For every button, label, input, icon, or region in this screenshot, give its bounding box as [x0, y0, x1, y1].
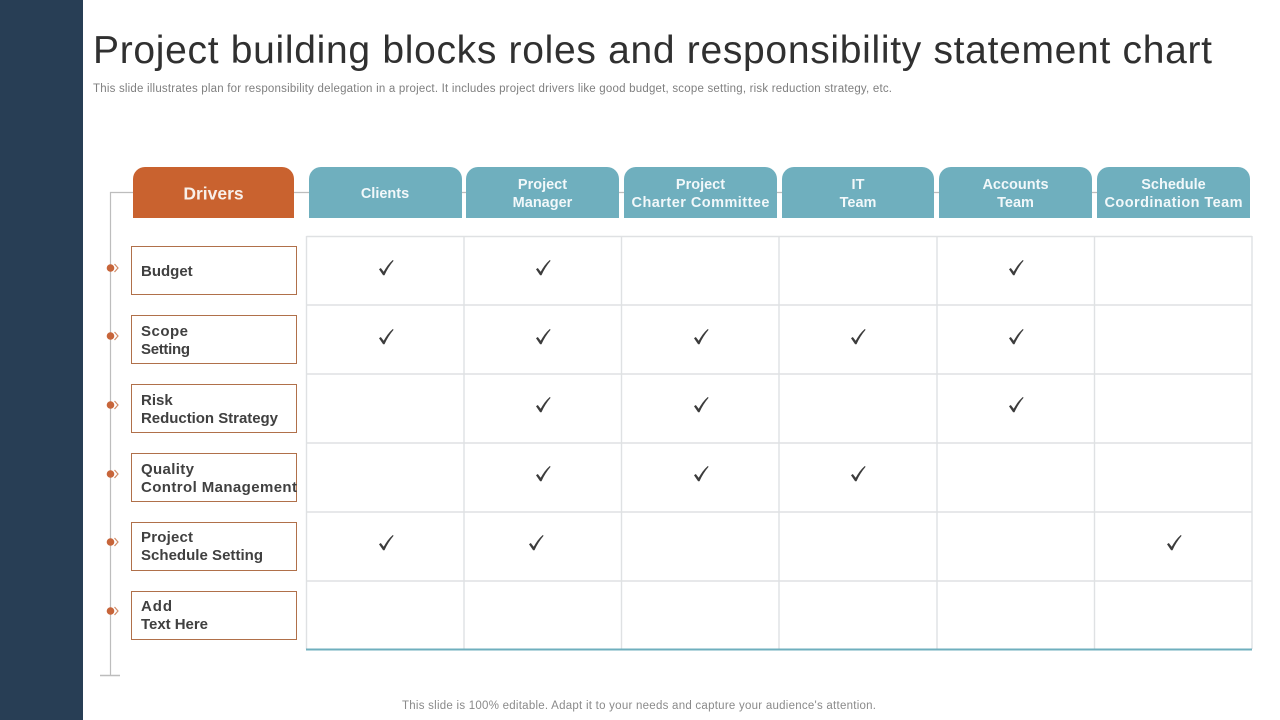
- driver: project schedule setting: Project: [141, 529, 193, 546]
- timeline connector: [100, 192, 1097, 676]
- driver: scope setting: Setting: [141, 341, 190, 358]
- header: accounts team: [939, 167, 1092, 218]
- driver: scope setting: [107, 316, 296, 364]
- header: clients: [309, 167, 462, 218]
- driver: risk reduction strategy: Risk: [141, 392, 173, 409]
- responsibility grid: [306, 236, 1252, 650]
- header: project charter committee: [624, 167, 777, 218]
- header: project manager: [466, 167, 619, 218]
- driver: project schedule setting: Schedule Setting: [141, 547, 263, 564]
- header: project charter committee: Project: [676, 177, 725, 193]
- driver: quality control management: Control Management: [141, 479, 297, 496]
- driver: scope setting: Scope: [141, 323, 188, 340]
- driver: risk reduction strategy: Reduction Strategy: [141, 410, 279, 427]
- header: drivers: [133, 167, 294, 218]
- driver: quality control management: Quality: [141, 461, 195, 478]
- header: it team: IT: [852, 177, 865, 193]
- driver: budget: [107, 246, 296, 294]
- driver: add text here: [107, 592, 296, 640]
- header: project manager: Manager: [513, 195, 573, 211]
- header: it team: [782, 167, 934, 218]
- driver: risk reduction strategy: [107, 384, 296, 432]
- title: Project building blocks roles and responsibility statement chart: [93, 29, 1212, 72]
- header: schedule coordination team: Schedule: [1141, 177, 1206, 193]
- driver: add text here: Add: [141, 598, 172, 615]
- footer note: This slide is 100% editable. Adapt it to your needs and capture your audience's attention.: [402, 700, 876, 712]
- header: accounts team: Team: [997, 195, 1034, 211]
- driver: budget: Budget: [141, 263, 193, 280]
- check marks: [379, 260, 1182, 550]
- header: schedule coordination team: [1097, 167, 1250, 218]
- header: project charter committee: Charter Committee: [632, 195, 770, 211]
- header: project manager: Project: [518, 177, 567, 193]
- driver: quality control management: [107, 454, 297, 502]
- header: it team: Team: [840, 195, 876, 211]
- header: accounts team: Accounts: [982, 177, 1049, 193]
- header: clients: Clients: [361, 186, 409, 202]
- driver: add text here: Text Here: [141, 616, 208, 633]
- header: drivers: Drivers: [183, 184, 244, 204]
- driver: project schedule setting: [107, 522, 296, 570]
- sidebar: [0, 0, 83, 720]
- subtitle: This slide illustrates plan for responsibility delegation in a project. It includes project drivers like good budget, scope setting, risk reduction strategy, etc.: [93, 83, 892, 95]
- header: schedule coordination team: Coordination Team: [1104, 195, 1242, 211]
